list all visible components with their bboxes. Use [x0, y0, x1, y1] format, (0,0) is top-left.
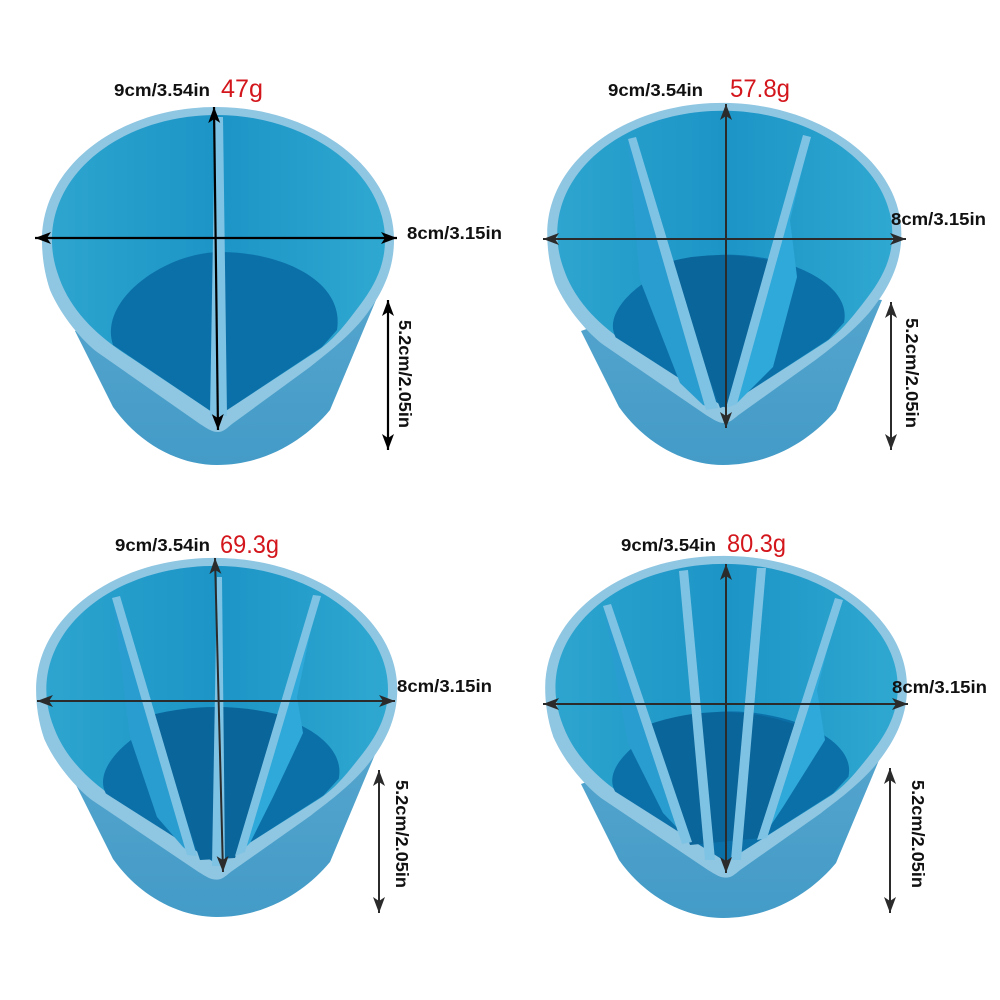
- arrow: depth 9cm: [215, 558, 223, 872]
- right divider side face: [240, 595, 318, 853]
- cup outer body: [75, 280, 376, 465]
- label: weight 69.3g: 69.3g: [220, 531, 279, 559]
- label: 8cm: 8cm/3.15in: [407, 223, 502, 243]
- arrow: width 8cm: [543, 238, 906, 240]
- label: 8cm: 8cm/3.15in: [397, 676, 492, 696]
- label: 9cm: 9cm/3.54in: [621, 535, 716, 555]
- divider 4: [757, 598, 843, 840]
- label: 5.2cm: 5.2cm/2.05in: [392, 780, 412, 888]
- right divider side face: [762, 600, 840, 837]
- arrow: height 5.2cm: [387, 300, 389, 450]
- panel: 5-section cup, 80.3g: [543, 530, 987, 918]
- divider 2: [679, 570, 715, 860]
- panel: 4-section cup, 69.3g: [36, 531, 492, 917]
- arrow: height 5.2cm: [889, 768, 891, 913]
- right divider: [726, 135, 811, 408]
- cup rim: [36, 558, 397, 880]
- label: 9cm: 9cm/3.54in: [114, 80, 210, 100]
- left divider: [112, 596, 197, 856]
- cup rim: [547, 103, 901, 423]
- label: weight 80.3g: 80.3g: [727, 530, 786, 558]
- left divider side face: [113, 597, 193, 855]
- cup interior wall: [52, 115, 385, 416]
- cup outer body: [75, 732, 376, 917]
- cup interior wall: [46, 566, 388, 864]
- cup interior wall: [555, 564, 898, 862]
- cup rim: [42, 107, 394, 432]
- arrow: width 8cm: [37, 700, 395, 702]
- arrow: width 8cm: [35, 237, 397, 239]
- divider 3: [731, 568, 766, 860]
- label: 9cm: 9cm/3.54in: [115, 535, 210, 555]
- arrow: depth 9cm: [725, 104, 727, 428]
- divider: [210, 117, 227, 416]
- centre compartment floor: [151, 707, 281, 860]
- divider 1: [603, 604, 692, 844]
- arrow: height 5.2cm: [890, 302, 892, 450]
- arrow: width 8cm: [543, 703, 908, 705]
- panel: 2-section cup, 47g: [35, 75, 502, 465]
- label: 5.2cm: 5.2cm/2.05in: [902, 318, 922, 428]
- label: 9cm: 9cm/3.54in: [608, 80, 703, 100]
- label: weight 57.8g: 57.8g: [730, 75, 790, 103]
- cup floor: [111, 252, 338, 416]
- cup outer body: [581, 733, 882, 918]
- left divider side face: [628, 138, 712, 408]
- cup floor: [612, 711, 849, 862]
- left divider side face: [604, 605, 687, 840]
- centre compartments floor: [647, 712, 797, 845]
- label: weight 47g: 47g: [221, 75, 263, 103]
- cup floor: [613, 255, 845, 407]
- cup floor: [103, 707, 339, 864]
- arrow: height 5.2cm: [378, 770, 380, 913]
- left divider: [628, 137, 718, 410]
- label: 8cm: 8cm/3.15in: [892, 677, 987, 697]
- cup rim: [545, 556, 907, 878]
- arrow: depth 9cm: [725, 564, 727, 873]
- panel: 3-section cup, 57.8g: [543, 75, 986, 465]
- right divider side face: [733, 138, 810, 403]
- label: 5.2cm: 5.2cm/2.05in: [395, 320, 415, 428]
- centre compartment floor: [668, 255, 776, 408]
- cup outer body: [581, 280, 882, 465]
- label: 5.2cm: 5.2cm/2.05in: [908, 780, 928, 888]
- centre divider: [212, 577, 225, 866]
- cup interior wall: [557, 111, 892, 407]
- arrow: depth 9cm: [214, 107, 218, 430]
- right divider: [235, 595, 321, 856]
- label: 8cm: 8cm/3.15in: [891, 209, 986, 229]
